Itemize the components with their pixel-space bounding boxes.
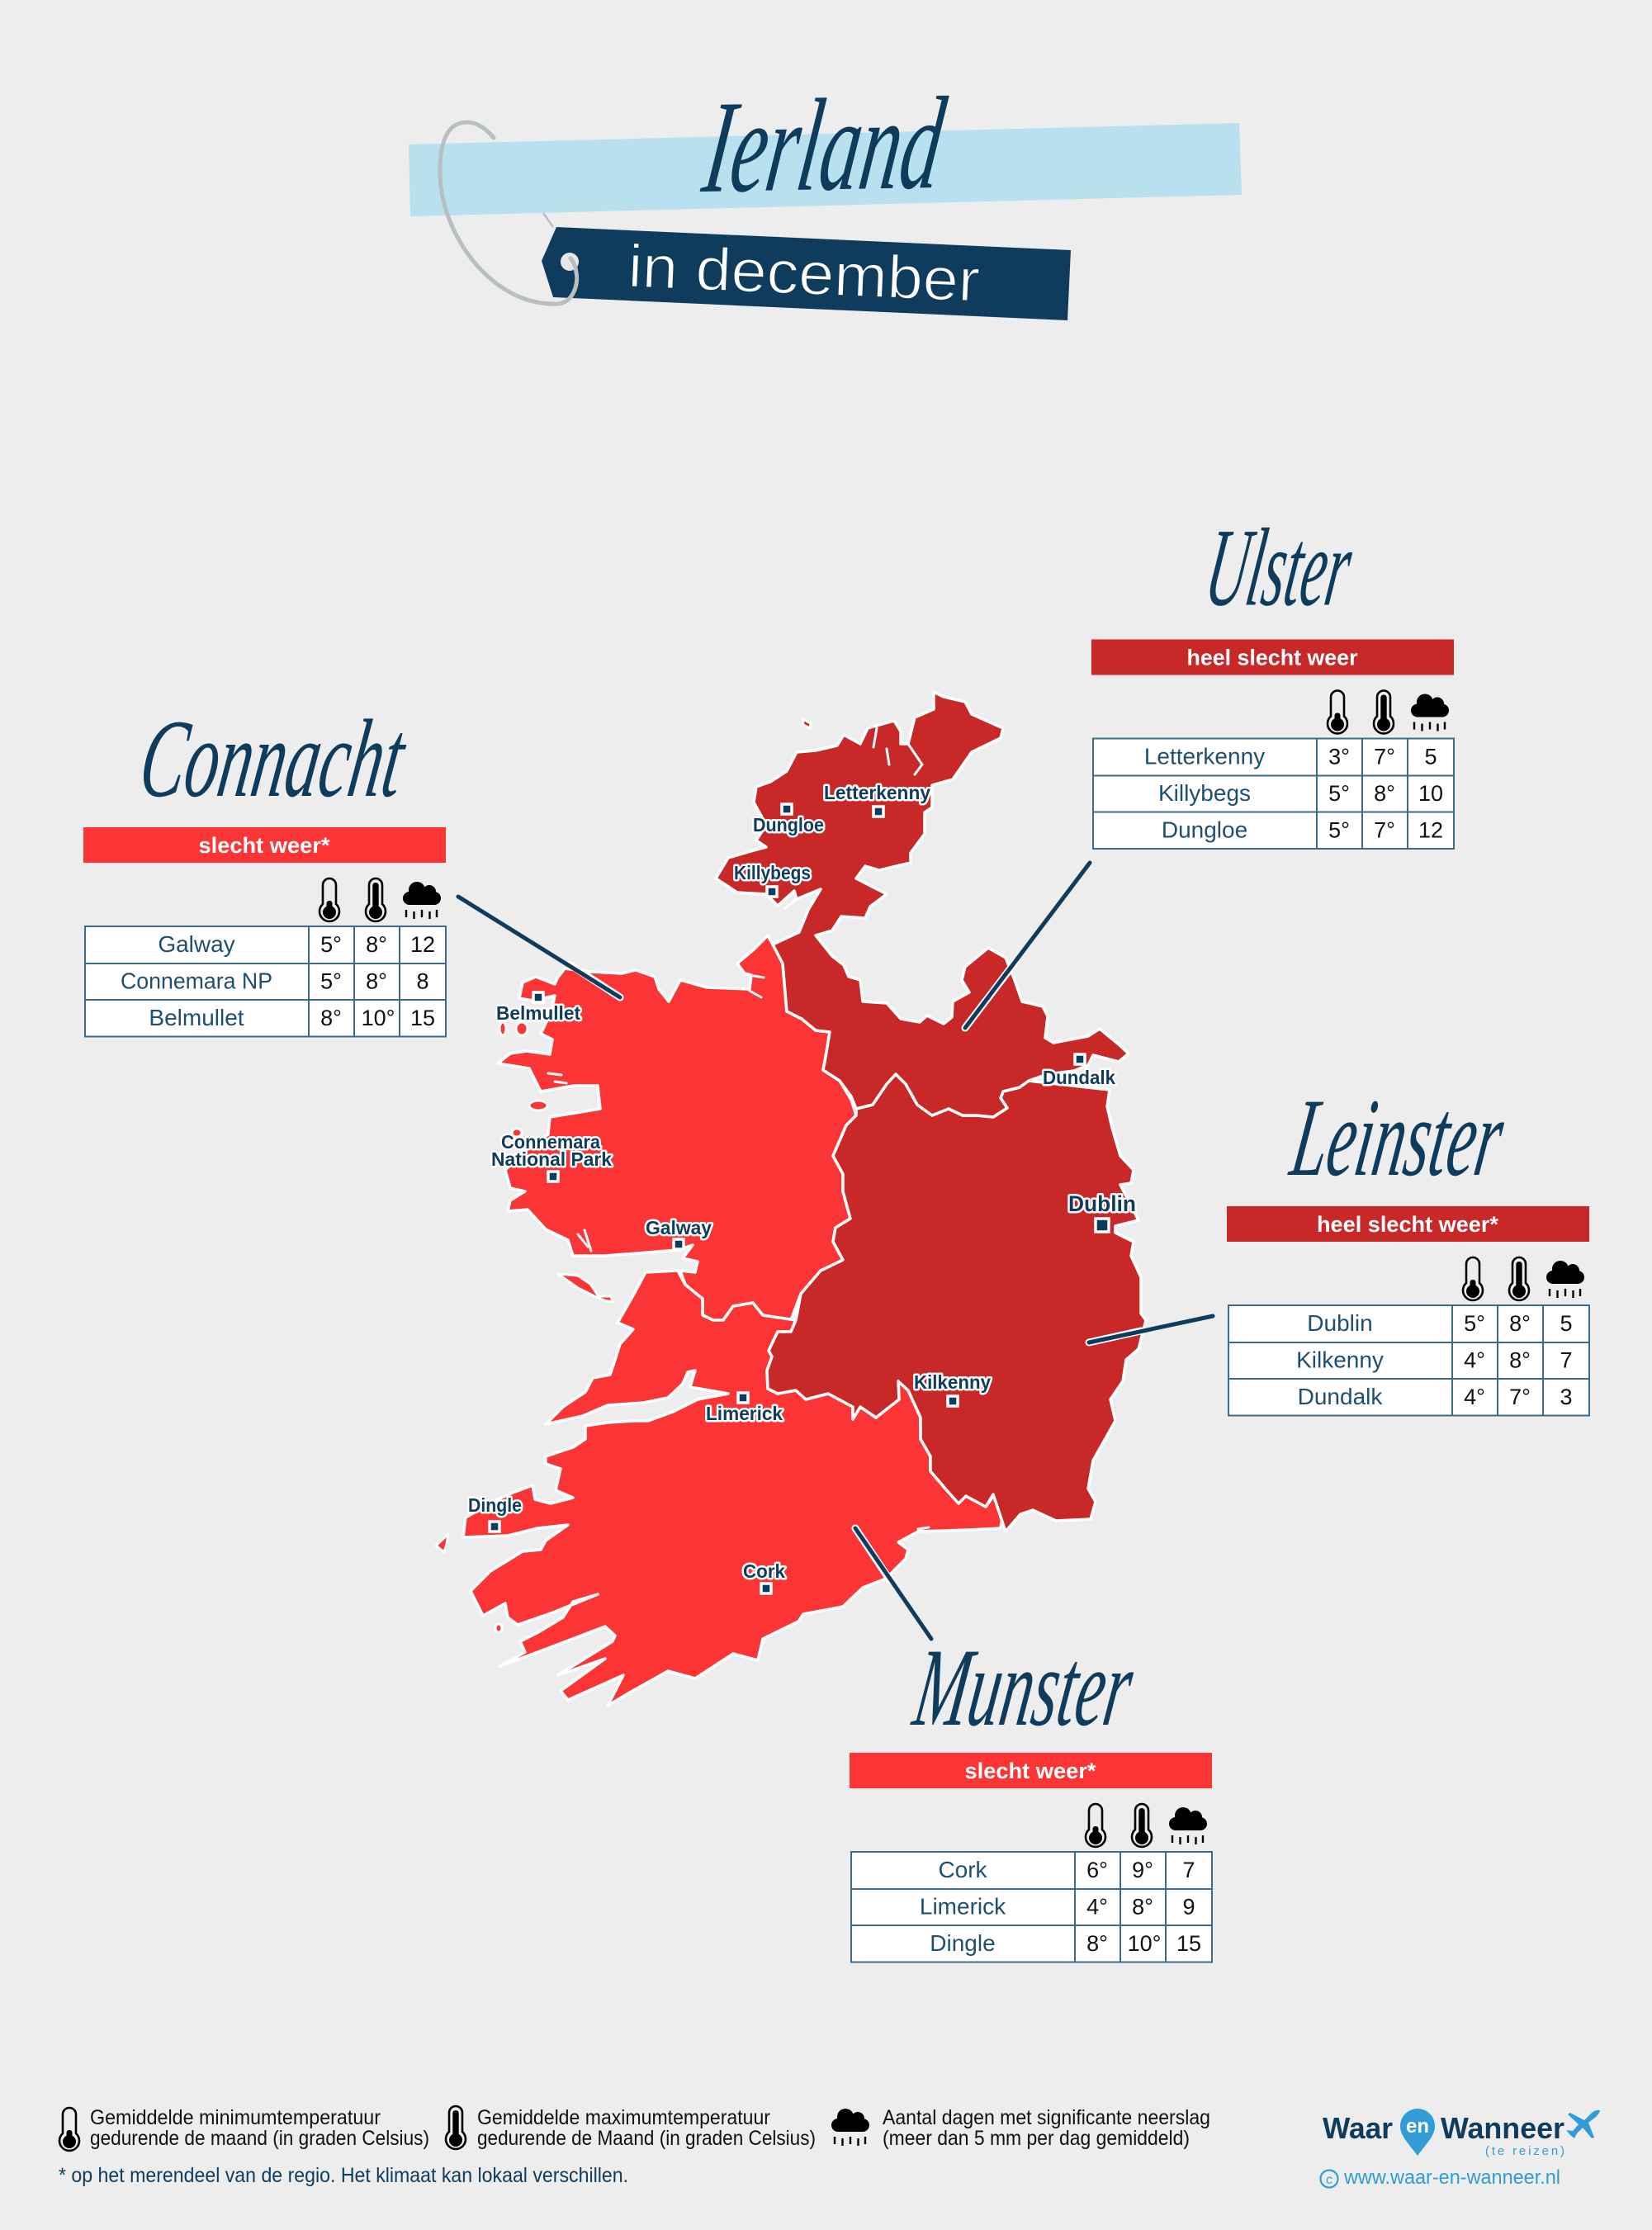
climate table [851,1852,1212,1962]
city: Belmullet [496,992,580,1024]
climate table: 10° [362,1006,395,1030]
climate table: 5° [1328,781,1350,806]
city: Dundalk [1043,1054,1115,1088]
city: Cork: Cork [743,1560,785,1582]
Ulster pointer [965,962,1015,1028]
title block [409,70,1242,320]
climate table: Killybegs [1158,780,1251,806]
legend: minimum temperature [59,2106,429,2151]
climate table: 5 [1560,1311,1573,1336]
climate table: Dingle [930,1930,996,1956]
subtitle: in december: in december [627,233,981,315]
climate table: 15 [1176,1931,1201,1956]
region: Leinster [767,1074,1146,1532]
climate table: 12 [410,932,435,957]
copyright symbol: c [1326,2173,1332,2187]
climate table: 7 [1560,1347,1573,1372]
climate table: 5° [1464,1311,1485,1336]
Aran islands [558,1274,613,1302]
Achill south [516,1022,528,1035]
heading: Ulster: Ulster [1198,506,1360,629]
climate table [1228,1305,1589,1415]
climate table: Galway [158,931,235,957]
climate table: 4° [1464,1347,1485,1372]
city: Galway [646,1217,712,1249]
climate table: Dungloe [1162,817,1247,842]
climate table: 8° [1509,1311,1531,1336]
icons [320,878,441,921]
legend: minimum temperature: Gemiddelde minimumtemperatuur [90,2106,381,2129]
climate table [85,926,446,1037]
region: Connacht [498,935,856,1320]
climate table: 8° [320,1006,342,1030]
panel: Munster [850,1626,1212,1962]
heading: Munster: Munster [906,1626,1142,1749]
weather bar: slecht weer* [964,1759,1096,1783]
Leinster pointer [1089,1331,1141,1342]
weather bar: heel slecht weer [1187,646,1358,670]
Clare island [529,1101,547,1110]
climate table: 7° [1374,817,1395,842]
logo tagline: (te reizen) [1485,2144,1564,2158]
climate table: 9 [1182,1894,1195,1919]
coastal inlets [548,728,929,1529]
weather bar [850,1753,1212,1788]
climate table: 10 [1418,781,1443,806]
city: Killybegs [734,862,811,897]
climate table: Dublin [1307,1310,1373,1336]
weather bar [83,827,446,863]
region: Munster [463,1271,1003,1706]
climate table: Dundalk [1298,1384,1383,1409]
climate table: 4° [1086,1894,1108,1919]
climate table: Cork [938,1857,988,1882]
region: Ulster [716,692,1129,1117]
climate table: 8° [1374,781,1395,806]
climate table: 5 [1424,745,1437,769]
legend: precipitation [831,2106,1210,2150]
city: Dundalk: Dundalk [1043,1067,1115,1088]
weather bar [1091,639,1454,675]
climate table: 5° [320,969,342,994]
legend: precipitation: Aantal dagen met significante neerslag [883,2106,1210,2129]
city: Letterkenny [824,782,930,817]
logo [1321,2109,1600,2189]
legend: maximum temperature: gedurende de Maand (in graden Celsius) [477,2127,816,2150]
climate table: 3 [1560,1385,1573,1409]
city: Belmullet: Belmullet [496,1002,580,1024]
copyright symbol [1321,2170,1337,2188]
climate table: 15 [410,1006,435,1030]
city: Dublin [1068,1191,1136,1232]
climate table: 8° [1132,1894,1153,1919]
weather bar: slecht weer* [198,833,330,858]
climate table: 9° [1132,1858,1153,1882]
Cape Clear [495,1624,502,1632]
city: Connemara National Park: Connemara [501,1131,600,1153]
icon: plane [1566,2110,1600,2138]
legend: maximum temperature [446,2106,816,2150]
city: Letterkenny: Letterkenny [824,782,930,803]
city: Dingle: Dingle [468,1494,522,1516]
navy tag [542,227,1071,320]
title: Ierland: Ierland [695,70,953,220]
islands [436,719,811,1632]
weather bar: heel slecht weer* [1317,1212,1498,1237]
map of Ireland [436,692,1213,1706]
legend: precipitation: (meer dan 5 mm per dag gemiddeld) [883,2127,1190,2150]
climate table: 8° [1509,1347,1531,1372]
Connacht pointer [570,964,620,997]
climate table: 5° [1328,817,1350,842]
climate table: 7° [1509,1385,1531,1409]
city: Connemara National Park [491,1131,612,1181]
climate table: 4° [1464,1385,1485,1409]
climate table: Connemara NP [121,968,272,994]
ring stroke [440,122,577,304]
city: Dungloe [753,804,824,836]
heading: Connacht: Connacht [132,698,414,821]
light blue title band [409,123,1242,216]
climate table: 8° [1086,1931,1108,1956]
climate table: Belmullet [149,1005,244,1030]
Blasket islands [436,1534,448,1552]
icons [1086,1804,1207,1847]
city: Kilkenny: Kilkenny [914,1371,991,1393]
climate table: 10° [1128,1931,1161,1956]
icons [1328,690,1449,733]
tag hole [561,253,579,271]
panel: Leinster [1227,1077,1589,1415]
climate table: 12 [1418,817,1443,842]
climate table: Kilkenny [1296,1347,1384,1372]
climate table [1093,738,1454,849]
climate table: 5° [320,932,342,957]
climate table: 7 [1182,1858,1195,1882]
string behind tag [543,213,553,227]
climate table: 8° [366,932,387,957]
panel: Connacht [83,698,446,1037]
climate table: Limerick [920,1894,1006,1919]
website: www.waar-en-wanneer.nl [1343,2166,1560,2189]
logo pin [1400,2109,1435,2156]
icons [1463,1257,1584,1300]
climate table: 8° [366,969,387,994]
logo en: en [1406,2115,1429,2138]
city: Galway: Galway [646,1217,712,1238]
climate table: 6° [1086,1858,1108,1882]
climate table: 3° [1328,745,1350,769]
Munster pointer [855,1528,890,1580]
city: Limerick: Limerick [706,1403,783,1424]
city: Dublin: Dublin [1068,1191,1136,1216]
city: Cork [743,1560,785,1593]
legend: maximum temperature: Gemiddelde maximumtemperatuur [477,2106,770,2129]
footnote: * op het merendeel van de regio. Het klimaat kan lokaal verschillen. [59,2164,628,2187]
legend: minimum temperature: gedurende de maand (in graden Celsius) [90,2127,429,2150]
Inishkea [499,1022,506,1035]
small Donegal island [802,719,811,728]
city: Dungloe: Dungloe [753,814,824,836]
city: Connemara National Park: National Park [491,1148,612,1170]
city: Kilkenny [914,1371,991,1406]
city: Dingle [468,1494,522,1532]
climate table: 7° [1374,745,1395,769]
weather bar [1227,1206,1589,1242]
Inishturk [512,1129,522,1137]
logo wordmark: Waar: Waar [1323,2111,1393,2145]
city: Killybegs: Killybegs [734,862,811,883]
logo wordmark: Wanneer: Wanneer [1441,2111,1564,2145]
climate table: 8 [416,969,429,994]
panel: Ulster [1091,506,1454,849]
legend [59,2106,1210,2187]
climate table: Letterkenny [1144,743,1265,769]
city: Limerick [706,1393,783,1424]
